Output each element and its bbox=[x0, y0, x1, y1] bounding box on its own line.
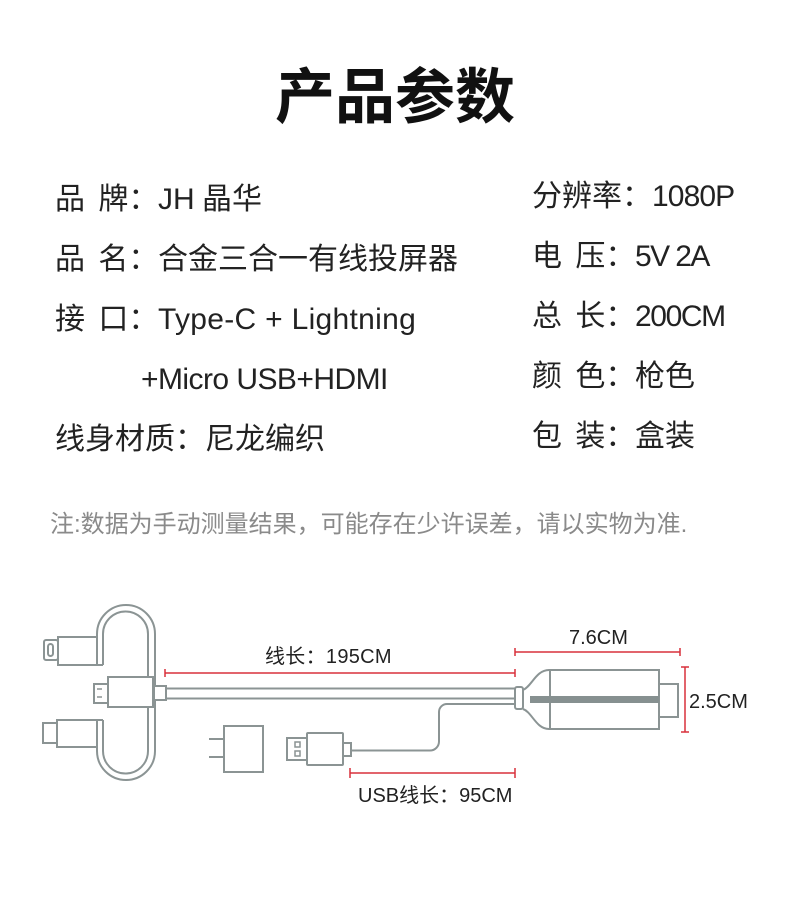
spec: colour: 枪色 bbox=[635, 360, 695, 393]
spec: packaging: 盒装 bbox=[635, 420, 695, 453]
spec: interface continued: +Micro USB+HDMI bbox=[141, 363, 388, 396]
spec: packaging bbox=[532, 420, 695, 453]
spec: brand: JH 晶华 bbox=[158, 183, 262, 216]
icon: main cable bbox=[166, 688, 516, 698]
spec: voltage: 5V 2A bbox=[635, 240, 709, 273]
dimension: USB cable length line bbox=[350, 768, 515, 778]
icon: USB plug and cable bbox=[287, 704, 516, 765]
icon: micro USB plug bbox=[94, 677, 166, 707]
title: 产品参数 bbox=[275, 64, 515, 131]
spec: voltage: 电 压： bbox=[532, 240, 635, 273]
spec: product name: 合金三合一有线投屏器 bbox=[158, 243, 458, 276]
panel: right specifications bbox=[532, 180, 734, 453]
spec: interface: Type-C + Lightning bbox=[158, 303, 416, 336]
spec: cable material: 尼龙编织 bbox=[205, 423, 325, 456]
label: cable length: 线长：195CM bbox=[265, 646, 392, 668]
dimension: cable length line bbox=[165, 669, 515, 677]
dimension: dongle length line bbox=[515, 648, 680, 656]
spec: resolution: 分辨率： bbox=[532, 180, 652, 213]
icon: HDMI dongle bbox=[515, 670, 678, 729]
spec: cable material bbox=[55, 423, 325, 456]
icon: power adapter bbox=[209, 726, 263, 772]
label: USB cable length: USB线长：95CM bbox=[358, 785, 512, 807]
spec: total length: 200CM bbox=[635, 300, 725, 333]
spec: packaging: 包 装： bbox=[532, 420, 635, 453]
spec: total length: 总 长： bbox=[532, 300, 635, 333]
spec: resolution bbox=[532, 180, 734, 213]
spec: cable material: 线身材质： bbox=[55, 423, 205, 456]
label: dongle width: 2.5CM bbox=[689, 691, 748, 713]
spec: interface: 接 口： bbox=[55, 303, 158, 336]
panel: left specifications bbox=[55, 183, 458, 456]
icon: lightning plug bbox=[44, 637, 97, 665]
label: dongle length: 7.6CM bbox=[569, 627, 628, 649]
spec: product name: 品 名： bbox=[55, 243, 158, 276]
dimension: dongle width line bbox=[681, 667, 689, 732]
spec: total length bbox=[532, 300, 725, 333]
footnote: 注:数据为手动测量结果，可能存在少许误差，请以实物为准. bbox=[50, 511, 687, 538]
spec: colour: 颜 色： bbox=[532, 360, 635, 393]
spec: brand: 品 牌： bbox=[55, 183, 158, 216]
spec: voltage bbox=[532, 240, 710, 273]
spec: brand bbox=[55, 183, 262, 216]
spec: colour bbox=[532, 360, 695, 393]
spec: resolution: 1080P bbox=[652, 180, 734, 213]
icon: type-C plug bbox=[43, 720, 97, 747]
icon: three-in-one connector loop bbox=[43, 605, 166, 780]
